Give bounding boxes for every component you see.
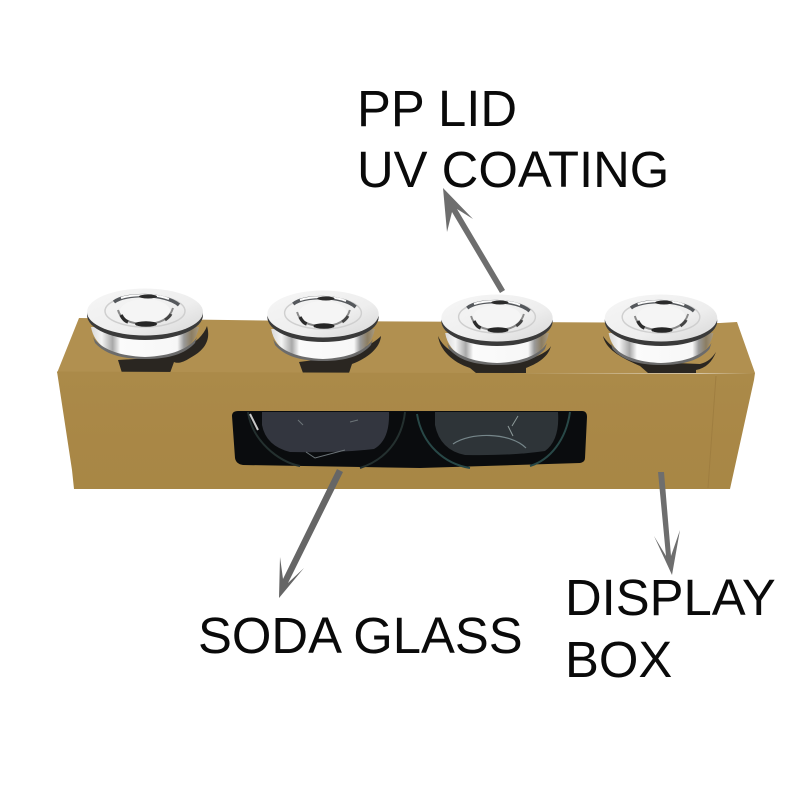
label: PP lid UV coating	[357, 80, 669, 198]
lid 2	[267, 290, 379, 361]
label: soda glass: SODA GLASS	[198, 607, 523, 664]
label: PP lid UV coating: PP LID	[357, 80, 517, 137]
box top flap	[57, 318, 755, 373]
arrow: display box	[654, 472, 680, 575]
lid openings	[118, 326, 716, 373]
display box	[57, 318, 755, 489]
jar right	[435, 412, 558, 455]
label: PP lid UV coating: UV COATING	[357, 141, 669, 198]
lid 1	[87, 288, 203, 359]
arrow: soda glass	[279, 469, 343, 598]
label: display box: BOX	[565, 631, 672, 688]
lid 3	[441, 294, 553, 365]
box front face	[57, 372, 755, 489]
jar left	[262, 412, 389, 452]
jar lids	[87, 288, 717, 365]
lid 4	[605, 294, 717, 365]
window showing soda glass jars	[232, 411, 587, 468]
label: display box: DISPLAY	[565, 569, 776, 626]
arrow: PP lid	[443, 188, 505, 293]
label: display box	[565, 569, 776, 688]
